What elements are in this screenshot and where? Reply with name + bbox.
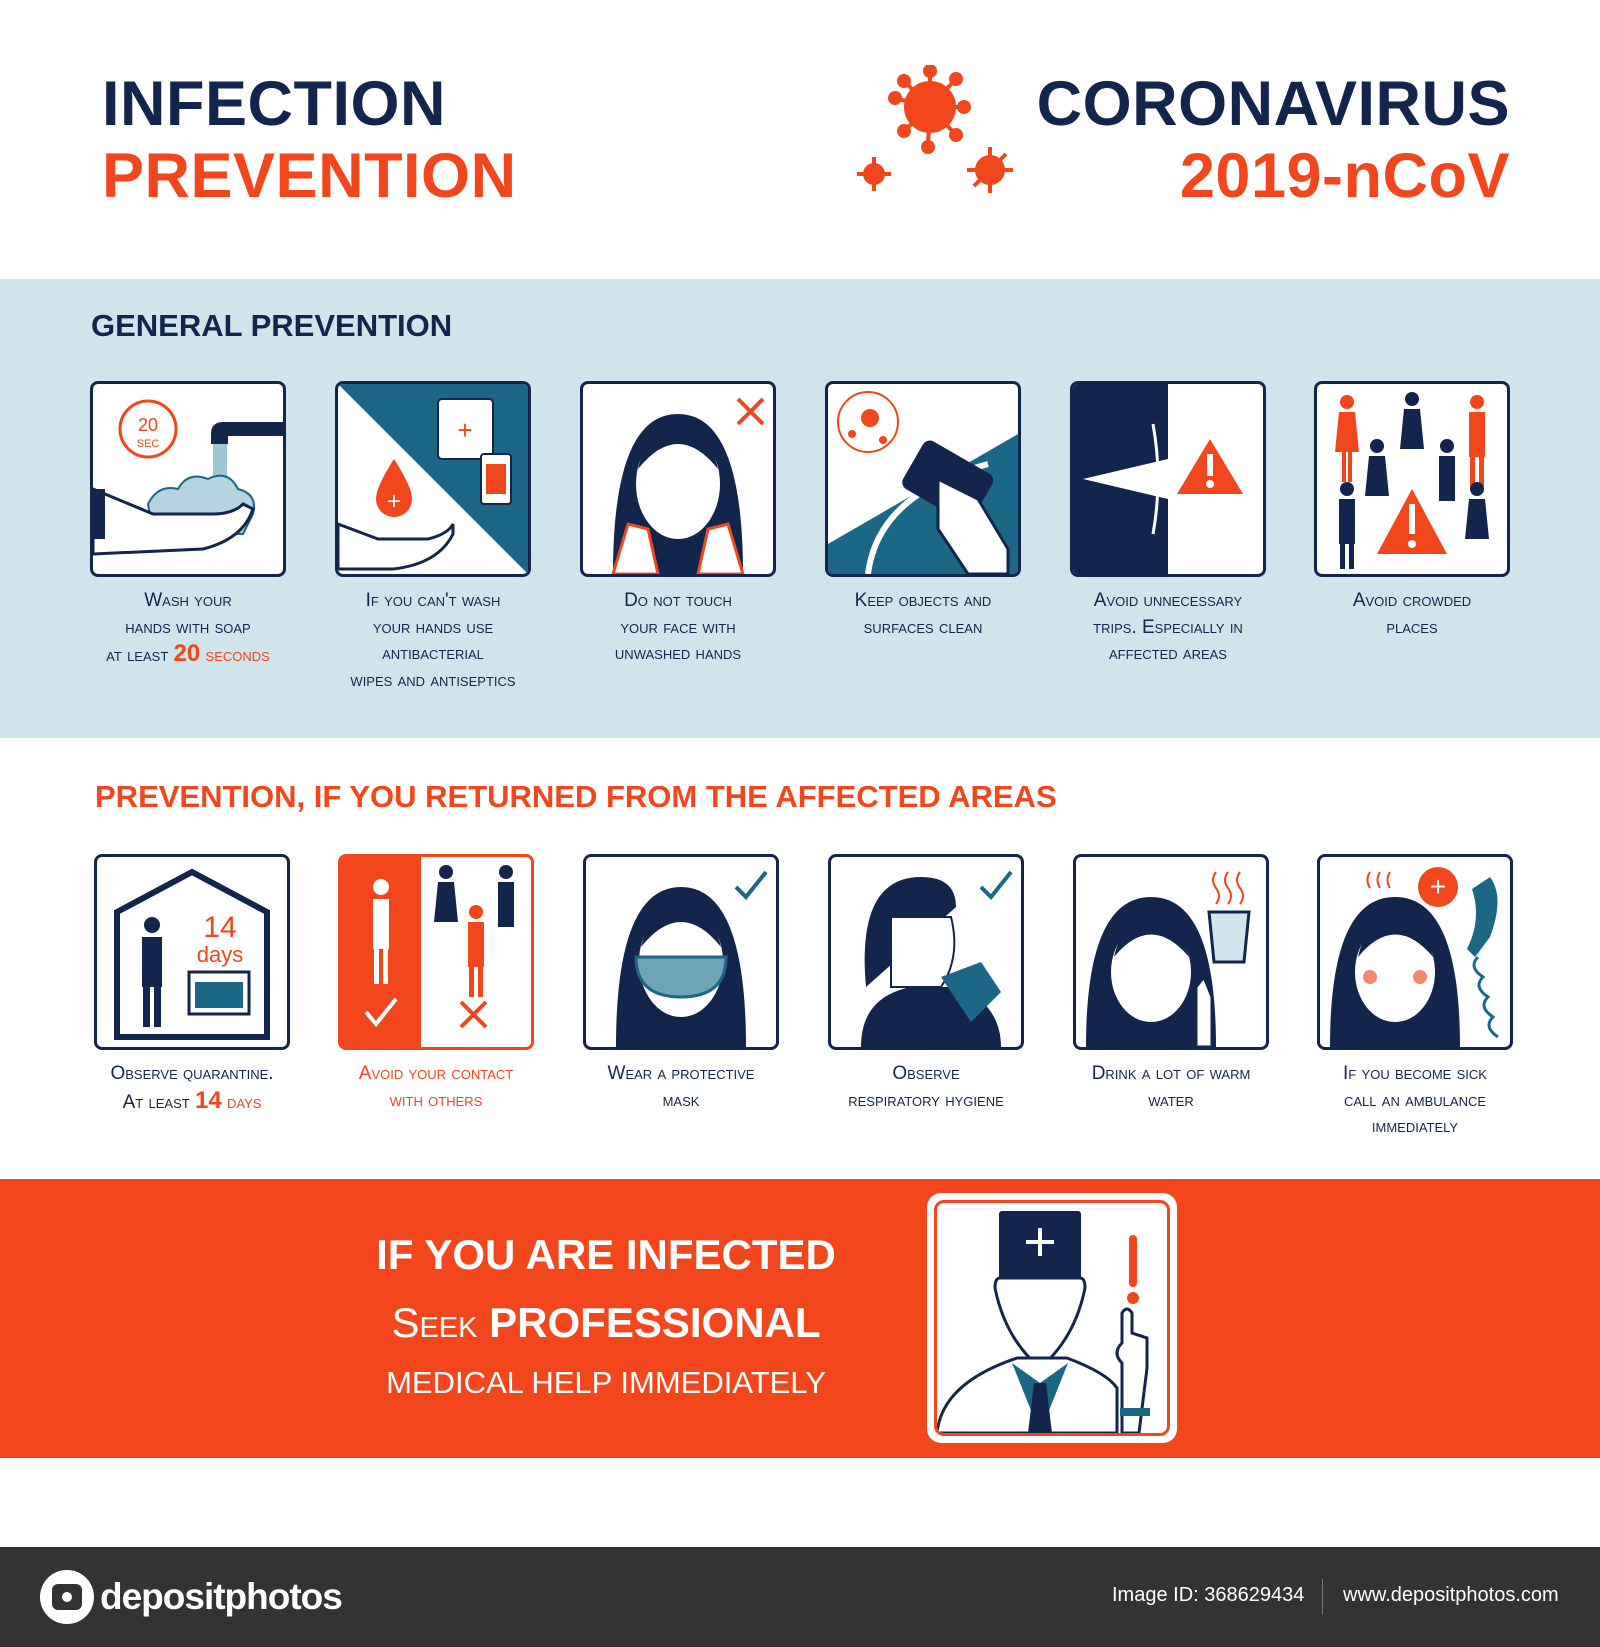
icon: doctor [927, 1193, 1177, 1443]
panel: if you are infected [0, 1179, 1600, 1458]
icon: antiseptics [335, 381, 531, 577]
title: infection prevention: PREVENTION [102, 141, 517, 211]
caption: antiseptics: wipes and antiseptics [350, 670, 516, 691]
caption: call ambulance [1343, 1063, 1487, 1137]
caption: crowded places [1353, 590, 1471, 638]
text: website: www.depositphotos.com [1343, 1584, 1559, 1606]
caption: warm water: water [1148, 1090, 1194, 1111]
icon: respiratory hygiene [828, 854, 1024, 1050]
caption: avoid contact [358, 1063, 513, 1111]
caption: antiseptics: your hands use [373, 617, 493, 638]
title: infection prevention [102, 69, 517, 211]
title: coronavirus [1037, 69, 1510, 211]
caption: avoid trips: Avoid unnecessary [1094, 590, 1242, 611]
caption: call ambulance: immediately [1372, 1116, 1458, 1137]
title: infection prevention: INFECTION [102, 69, 446, 139]
caption: mask: Wear a protective [608, 1063, 754, 1084]
caption: crowded places: places [1386, 617, 1438, 638]
caption: avoid trips: trips. Especially in [1093, 617, 1243, 638]
icon: viruses [857, 65, 1013, 193]
caption: wash hands: Wash your [144, 590, 232, 611]
caption: don't touch face [615, 590, 741, 664]
caption: avoid contact: with others [390, 1090, 482, 1111]
text: medical help immediately: MEDICAL HELP IMMEDIATELY [386, 1365, 826, 1400]
text: if you are infected: IF YOU ARE INFECTED [376, 1231, 836, 1278]
caption: avoid trips: affected areas [1109, 643, 1227, 664]
caption: call ambulance: If you become sick [1343, 1063, 1487, 1084]
icon: avoid trips [1070, 381, 1266, 577]
logo: depositphotos [40, 1570, 342, 1624]
text: image id: Image ID: 368629434 [1112, 1584, 1304, 1606]
caption: call ambulance: call an ambulance [1344, 1090, 1486, 1111]
icon: quarantine [94, 854, 290, 1050]
footer bar [0, 1547, 1600, 1647]
icon: call ambulance [1317, 854, 1513, 1050]
caption: quarantine: Observe quarantine. [110, 1063, 274, 1084]
caption: wash hands: hands with soap [125, 617, 251, 638]
caption: don't touch face: Do not touch [624, 590, 732, 611]
logo: depositphotos: depositphotos [100, 1576, 342, 1617]
icon: antiseptics: + [457, 415, 473, 445]
caption: wash hands [106, 590, 270, 667]
caption: respiratory hygiene [848, 1063, 1004, 1111]
panel: general prevention [0, 279, 1600, 738]
title: coronavirus: CORONAVIRUS [1037, 69, 1510, 139]
heading: returned from affected areas: PREVENTION, IF YOU RETURNED FROM THE AFFECTED AREAS [95, 779, 1057, 814]
caption: respiratory hygiene: Observe [892, 1063, 960, 1084]
caption: antiseptics [350, 590, 516, 691]
caption: don't touch face: your face with [620, 617, 736, 638]
caption: antiseptics: antibacterial [382, 643, 484, 664]
text: seek professional: Seek PROFESSIONAL [391, 1299, 821, 1346]
caption: avoid trips [1093, 590, 1243, 664]
caption: warm water: Drink a lot of warm [1092, 1063, 1250, 1084]
caption: quarantine: At least 14 days [123, 1087, 261, 1114]
caption: crowded places: Avoid crowded [1353, 590, 1471, 611]
caption: respiratory hygiene: respiratory hygiene [848, 1090, 1004, 1111]
caption: antiseptics: If you can't wash [366, 590, 500, 611]
caption: quarantine [110, 1063, 274, 1114]
caption: don't touch face: unwashed hands [615, 643, 741, 664]
caption: wash hands: at least 20 seconds [106, 640, 270, 667]
icon: crowded places [1314, 381, 1510, 577]
icon: quarantine: days [197, 942, 243, 967]
icon: antiseptics: + [387, 488, 401, 515]
caption: avoid contact: Avoid your contact [359, 1063, 513, 1084]
icon: wash hands: 20 [138, 415, 158, 435]
icon: quarantine: 14 [203, 911, 237, 944]
title: coronavirus: 2019-nCoV [1180, 141, 1510, 211]
caption: mask: mask [663, 1090, 699, 1111]
icon: call ambulance: + [1430, 871, 1446, 902]
heading: general prevention: GENERAL PREVENTION [91, 308, 452, 343]
icon: don't touch face [580, 381, 776, 577]
caption: warm water [1092, 1063, 1250, 1111]
icon: warm water [1073, 854, 1269, 1050]
caption: clean surfaces [855, 590, 991, 638]
caption: clean surfaces: surfaces clean [864, 617, 982, 638]
icon: wash hands [90, 381, 286, 577]
icon: mask [583, 854, 779, 1050]
icon: avoid contact [338, 854, 534, 1050]
caption: mask [608, 1063, 754, 1111]
caption: clean surfaces: Keep objects and [855, 590, 991, 611]
icon: clean surfaces [825, 381, 1021, 577]
icon: wash hands: SEC [137, 438, 159, 450]
